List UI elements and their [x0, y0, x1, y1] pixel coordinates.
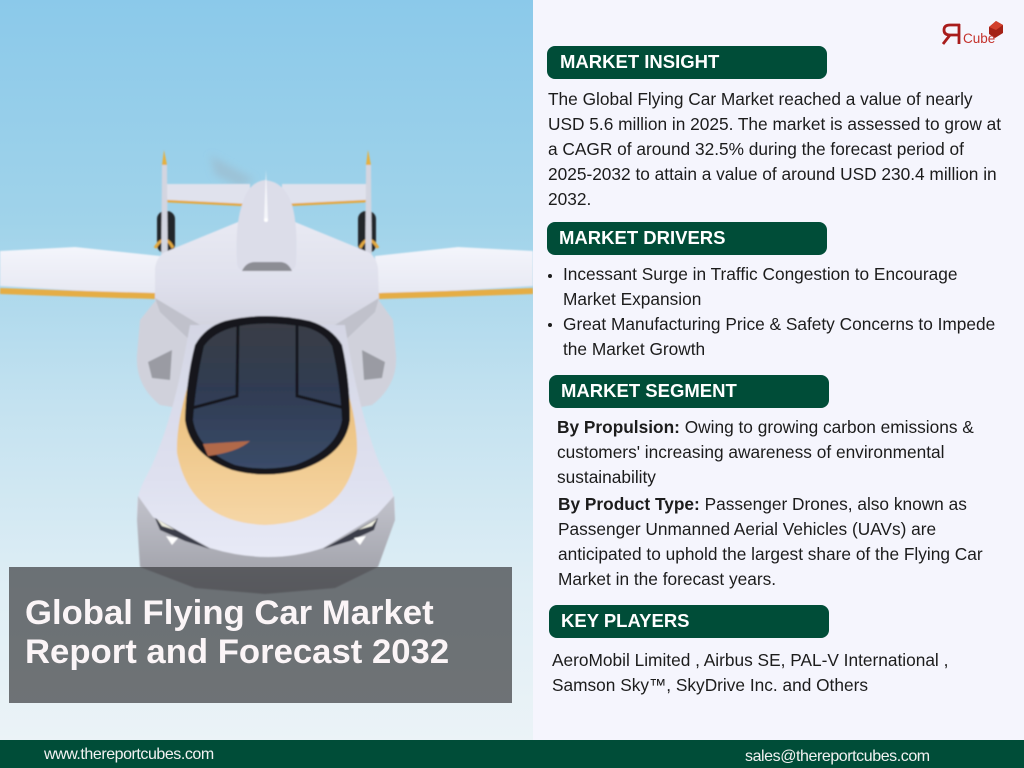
market insight text: USD 5.6 million in 2025. The market is assessed to grow at: [548, 114, 1001, 134]
segment: product type: anticipated to uphold the largest share of the Flying Car: [558, 544, 983, 564]
rear motors: [157, 211, 175, 253]
market drivers list: the Market Growth: [563, 339, 705, 359]
market insight text: The Global Flying Car Market reached a value of nearly: [548, 89, 973, 109]
segment: product type: [558, 494, 983, 589]
main upper body: [155, 222, 379, 325]
website: www.thereportcubes.com: [44, 746, 214, 763]
market insight text: a CAGR of around 32.5% during the forecast period of: [548, 139, 964, 159]
key players text: AeroMobil Limited , Airbus SE, PAL-V International ,: [552, 650, 948, 670]
segment: product type: Passenger Unmanned Aerial Vehicles (UAVs) are: [558, 519, 936, 539]
windshield: [185, 316, 350, 474]
heading: key players: [549, 605, 829, 638]
hero illustration: flying car on sky: [0, 0, 533, 740]
heading: market insight: [547, 46, 827, 79]
flying car: [0, 150, 533, 594]
segment: product type: Market in the forecast years.: [558, 569, 776, 589]
market drivers list: [548, 264, 995, 359]
logo: RCube: [942, 21, 1003, 46]
title text: Report and Forecast 2032: [25, 633, 449, 671]
headlights: [155, 518, 210, 549]
tail wing: [166, 184, 250, 204]
heading: market insight: MARKET INSIGHT: [560, 51, 719, 72]
heading: market segment: [549, 375, 829, 408]
heading: key players: KEY PLAYERS: [561, 610, 690, 631]
propeller blur: [210, 155, 255, 187]
email: sales@thereportcubes.com: [745, 748, 930, 765]
title box: [9, 567, 512, 703]
segment: product type: By Product Type: Passenger Drones, also known as: [558, 494, 967, 514]
segment: propulsion: sustainability: [557, 467, 656, 487]
main wings: [0, 247, 160, 295]
market insight text: [548, 89, 1001, 209]
yellow hood: [177, 385, 357, 525]
heading: market segment: MARKET SEGMENT: [561, 380, 737, 401]
tail fins: [161, 165, 168, 300]
market insight text: 2025-2032 to attain a value of around USD 230.4 million in: [548, 164, 997, 184]
side pods: [137, 295, 195, 410]
heading: market drivers: [547, 222, 827, 255]
segment: propulsion: [557, 417, 974, 487]
market drivers list: Market Expansion: [563, 289, 701, 309]
title text: [25, 594, 449, 671]
market drivers list: Great Manufacturing Price & Safety Concerns to Impede: [563, 314, 995, 334]
lower nose: [137, 496, 395, 594]
key players text: [552, 650, 948, 695]
logo mark: Cube: [963, 31, 995, 46]
key players text: Samson Sky™, SkyDrive Inc. and Others: [552, 675, 868, 695]
nose: [137, 325, 395, 594]
market insight text: 2032.: [548, 189, 591, 209]
title text: Global Flying Car Market: [25, 594, 434, 632]
logo mark: [942, 21, 1003, 46]
footer bar: [0, 740, 1024, 768]
segment: propulsion: customers' increasing awareness of environmental: [557, 442, 945, 462]
market drivers list: Incessant Surge in Traffic Congestion to Encourage: [563, 264, 958, 284]
segment: propulsion: By Propulsion: Owing to growing carbon emissions &: [557, 417, 974, 437]
heading: market drivers: MARKET DRIVERS: [559, 227, 726, 248]
dorsal pod: [237, 180, 296, 271]
sky background: [0, 0, 533, 740]
